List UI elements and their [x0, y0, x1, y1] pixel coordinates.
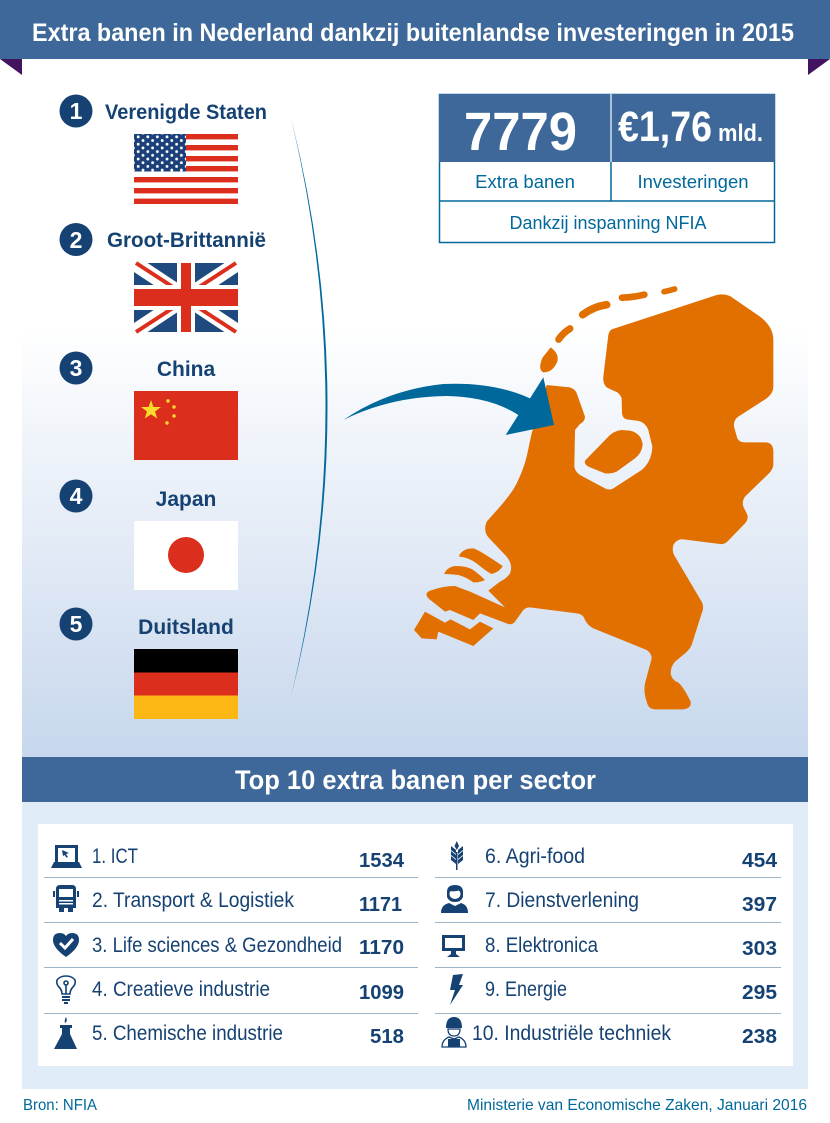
ranking: country 2 Great Britain: [60, 223, 266, 332]
ranking: country 3 China: China: [157, 358, 215, 381]
row 7: [485, 889, 777, 916]
key figures box: mld.: [718, 120, 763, 147]
key figures box: €1,76: [618, 103, 712, 151]
icon: laptop: [51, 845, 82, 868]
row 4: 4. Creatieve industrie: [92, 978, 270, 1001]
row 4: [92, 978, 404, 1004]
ranking: country 4 Japan: [60, 480, 238, 590]
background gradient panel: [22, 59, 808, 757]
ranking: country 3 China: [60, 352, 238, 460]
icon: flask: [54, 1017, 77, 1049]
row 6: 6. Agri-food: [485, 845, 585, 868]
row 3: 3. Life sciences & Gezondheid: [92, 934, 342, 957]
title banner: Extra banen in Nederland dankzij buitenlandse investeringen in 2015: [32, 19, 794, 47]
icon: heart with check: [53, 933, 79, 957]
title banner: [0, 0, 830, 75]
row 1: 1534: [359, 850, 405, 872]
row 4: 1099: [359, 982, 404, 1004]
sector table: [38, 824, 793, 1066]
row 2: 2. Transport & Logistiek: [92, 889, 294, 912]
row 2: [92, 889, 402, 916]
row 1: [92, 845, 405, 872]
row 10: [472, 1022, 777, 1048]
icon: worker with helmet: [442, 1017, 466, 1047]
row 10: 10. Industriële techniek: [472, 1022, 671, 1045]
icon: light bulb: [57, 976, 75, 1003]
icon: service person with headset: [441, 885, 468, 913]
map of the Netherlands: [414, 289, 773, 709]
arrow into the Netherlands: [343, 377, 554, 435]
row 9: 295: [742, 982, 777, 1004]
ranking: country 1 United States: [60, 94, 267, 204]
ranking: country 1 United States: 1: [70, 98, 83, 124]
ranking: country 1 United States: Verenigde Staten: [105, 101, 267, 124]
ranking: country 5 Germany: Duitsland: [138, 616, 234, 639]
key figures box: [439, 94, 775, 242]
ranking: country 2 Great Britain: 2: [70, 227, 82, 253]
row 9: 9. Energie: [485, 978, 567, 1001]
ranking: country 5 Germany: [60, 608, 238, 719]
row 7: 397: [742, 894, 777, 916]
row 3: 1170: [359, 937, 404, 959]
row 8: 8. Elektronica: [485, 934, 598, 957]
sector panel background: [22, 802, 808, 1089]
icon: truck: [53, 885, 79, 912]
row 8: 303: [742, 938, 777, 960]
row 8: [485, 934, 777, 960]
ranking: country 4 Japan: Japan: [156, 488, 216, 511]
row 10: 238: [742, 1026, 777, 1048]
row 1: 1. ICT: [92, 845, 138, 868]
icon: lightning bolt: [450, 974, 463, 1005]
key figures box: Dankzij inspanning NFIA: [510, 212, 707, 233]
key figures box: Extra banen: [475, 171, 575, 192]
curved divider line: [291, 118, 328, 697]
ranking: country 4 Japan: 4: [70, 483, 83, 509]
row 5: 5. Chemische industrie: [92, 1022, 283, 1045]
row 7: 7. Dienstverlening: [485, 889, 639, 912]
ranking: country 3 China: 3: [70, 355, 82, 381]
ranking: country 2 Great Britain: Groot-Brittannië: [107, 229, 266, 252]
key figures box: 7779: [464, 102, 577, 162]
credit note: Ministerie van Economische Zaken, Januari 2016: [467, 1097, 807, 1114]
ranking: country 5 Germany: 5: [70, 611, 83, 637]
row 5: [92, 1022, 404, 1048]
row 6: 454: [742, 850, 778, 872]
sector heading band: Top 10 extra banen per sector: [235, 765, 596, 795]
source note: Bron: NFIA: [23, 1097, 97, 1114]
icon: wheat: [451, 841, 463, 870]
row 6: [485, 845, 778, 872]
row 2: 1171: [359, 894, 402, 916]
sector heading band: [22, 757, 808, 802]
key figures box: Investeringen: [637, 171, 749, 192]
row 5: 518: [370, 1026, 404, 1048]
row 9: [485, 978, 777, 1004]
icon: monitor: [442, 935, 465, 957]
